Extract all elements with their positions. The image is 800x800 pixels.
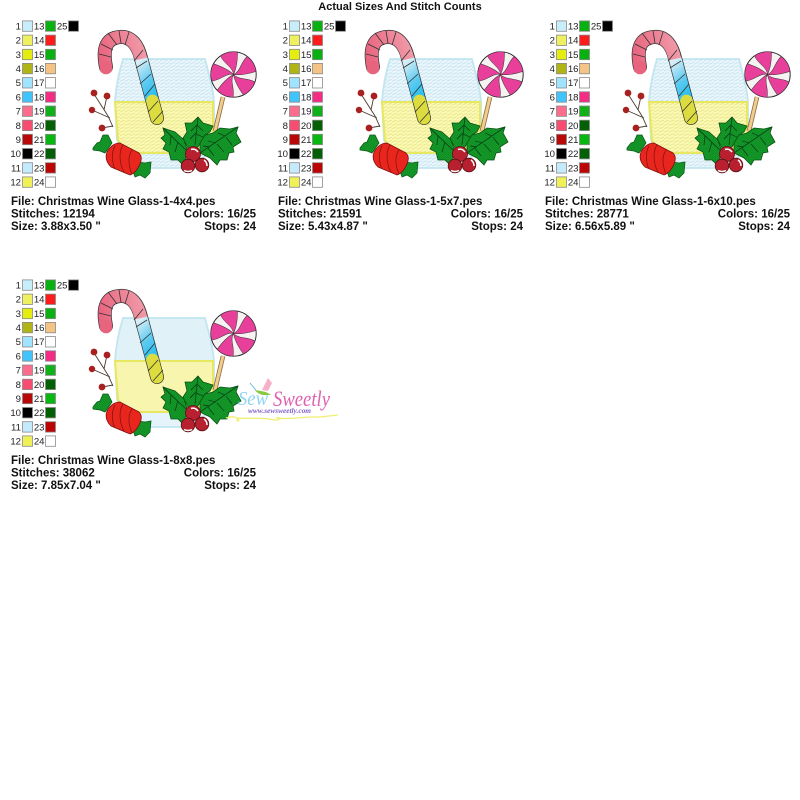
file details: Stops: 24 — [204, 221, 257, 233]
colour legend: 5 — [283, 78, 288, 89]
colour legend: 4 — [16, 323, 22, 334]
embroidery: wine glass with candy and holly — [89, 290, 257, 437]
colour legend: 20 — [34, 380, 44, 391]
colour legend: 14 — [568, 36, 579, 47]
colour legend: 2 — [16, 36, 21, 47]
colour legend: 7 — [16, 107, 21, 118]
file details: Size: 7.85x7.04 " — [11, 480, 101, 492]
colour legend: 12 — [277, 178, 288, 188]
file details: Colors: 16/25 — [718, 208, 791, 220]
colour legend: 22 — [568, 149, 578, 160]
colour legend — [10, 280, 78, 448]
colour legend: 25 — [57, 22, 68, 32]
colour legend: 4 — [16, 64, 22, 75]
colour legend: 21 — [34, 394, 44, 405]
colour legend: 17 — [34, 337, 44, 348]
colour legend: 21 — [34, 135, 44, 146]
colour legend: 8 — [16, 121, 21, 132]
colour legend: 21 — [301, 135, 312, 146]
file details — [11, 455, 257, 492]
colour legend: 18 — [301, 92, 312, 103]
colour legend: 13 — [34, 22, 44, 32]
colour legend: 13 — [34, 280, 44, 292]
yellow squiggle — [226, 415, 338, 421]
file details: Stitches: 38062 — [11, 468, 95, 480]
file details — [545, 196, 791, 233]
colour legend: 10 — [10, 149, 21, 160]
watermark: Sew Sweetly logo — [226, 378, 338, 421]
colour legend: 25 — [57, 280, 68, 292]
file details: File: Christmas Wine Glass-1-6x10.pes — [545, 196, 756, 208]
colour legend: 6 — [16, 92, 21, 103]
colour legend: 24 — [568, 178, 579, 188]
colour legend: 16 — [301, 64, 312, 75]
colour legend: 9 — [16, 135, 21, 146]
colour legend: 9 — [283, 135, 288, 146]
colour legend: 7 — [550, 107, 555, 118]
colour legend: 25 — [324, 22, 334, 32]
colour legend: 3 — [550, 50, 555, 61]
colour legend: 16 — [568, 64, 578, 75]
colour legend: 20 — [301, 121, 312, 132]
colour legend: 18 — [34, 92, 44, 103]
colour legend: 3 — [16, 50, 21, 61]
file details: Stops: 24 — [471, 221, 524, 233]
file details: Size: 3.88x3.50 " — [11, 221, 101, 233]
colour legend: 22 — [34, 149, 44, 160]
colour legend: 15 — [34, 309, 44, 320]
colour legend: 12 — [10, 436, 21, 448]
colour legend: 14 — [34, 295, 45, 306]
colour legend: 4 — [550, 64, 556, 75]
file details: Size: 5.43x4.87 " — [278, 221, 368, 233]
colour legend: 2 — [550, 36, 555, 47]
colour legend: 5 — [550, 78, 555, 89]
file details: File: Christmas Wine Glass-1-8x8.pes — [11, 455, 215, 467]
colour legend: 23 — [568, 163, 578, 174]
title: Actual Sizes And Stitch Counts — [318, 1, 482, 13]
colour legend — [277, 21, 346, 189]
logo wordmark: Sew — [238, 388, 269, 410]
file details: Stitches: 28771 — [545, 208, 629, 220]
colour legend: 12 — [10, 178, 21, 188]
colour legend: 23 — [34, 422, 44, 433]
colour legend: 9 — [550, 135, 555, 146]
colour legend: 23 — [301, 163, 312, 174]
colour legend: 19 — [568, 107, 578, 118]
colour legend: 7 — [283, 107, 288, 118]
colour legend: 6 — [16, 351, 21, 362]
colour legend: 13 — [568, 22, 578, 32]
file details — [11, 196, 257, 233]
colour legend: 6 — [550, 92, 555, 103]
colour legend: 2 — [16, 295, 21, 306]
colour legend: 24 — [34, 436, 45, 448]
colour legend: 19 — [301, 107, 312, 118]
colour legend: 17 — [301, 78, 312, 89]
colour legend: 14 — [34, 36, 45, 47]
colour legend: 1 — [283, 22, 288, 32]
file details: Stops: 24 — [738, 221, 791, 233]
file details: Colors: 16/25 — [451, 208, 524, 220]
colour legend: 20 — [568, 121, 578, 132]
file details: File: Christmas Wine Glass-1-5x7.pes — [278, 196, 482, 208]
colour legend: 1 — [16, 22, 21, 32]
colour legend: 14 — [301, 36, 312, 47]
colour legend: 25 — [591, 22, 602, 32]
panel: 6x10 design — [544, 21, 791, 233]
panel: 5x7 design — [277, 21, 524, 233]
colour legend: 8 — [283, 121, 288, 132]
embroidery: wine glass with candy and holly — [89, 31, 257, 178]
colour legend: 24 — [301, 178, 312, 188]
colour legend: 22 — [301, 149, 312, 160]
colour legend: 19 — [34, 366, 44, 377]
colour legend: 10 — [544, 149, 555, 160]
colour legend: 5 — [16, 78, 21, 89]
logo wordmark: www.sewsweetly.com — [248, 406, 311, 415]
colour legend: 17 — [34, 78, 44, 89]
embroidery: wine glass with candy and holly — [623, 31, 791, 178]
colour legend — [544, 21, 612, 189]
colour legend — [10, 21, 78, 189]
colour legend: 5 — [16, 337, 21, 348]
panel: 8x8 design — [10, 280, 257, 492]
logo wordmark — [238, 386, 330, 415]
panel: 4x4 design — [10, 21, 257, 233]
colour legend: 18 — [34, 351, 44, 362]
embroidery: wine glass with candy and holly — [356, 31, 524, 178]
colour legend: 24 — [34, 178, 45, 188]
colour legend: 20 — [34, 121, 44, 132]
colour legend: 23 — [34, 163, 44, 174]
colour legend: 4 — [283, 64, 289, 75]
colour legend: 11 — [545, 163, 555, 174]
logo wordmark: Sweetly — [273, 386, 330, 411]
file details: Stops: 24 — [204, 480, 257, 492]
colour legend: 10 — [277, 149, 288, 160]
file details: File: Christmas Wine Glass-1-4x4.pes — [11, 196, 215, 208]
colour legend: 7 — [16, 366, 21, 377]
colour legend: 18 — [568, 92, 578, 103]
colour legend: 12 — [544, 178, 555, 188]
colour legend: 1 — [16, 280, 21, 292]
colour legend: 11 — [11, 163, 21, 174]
colour legend: 10 — [10, 408, 21, 419]
file details: Stitches: 12194 — [11, 208, 95, 220]
colour legend: 16 — [34, 64, 44, 75]
colour legend: 6 — [283, 92, 288, 103]
colour legend: 3 — [283, 50, 288, 61]
file details — [278, 196, 524, 233]
colour legend: 3 — [16, 309, 21, 320]
colour legend: 11 — [278, 163, 288, 174]
colour legend: 17 — [568, 78, 578, 89]
colour legend: 9 — [16, 394, 21, 405]
icon: hummingbird — [250, 378, 272, 395]
colour legend: 8 — [550, 121, 555, 132]
file details: Stitches: 21591 — [278, 208, 362, 220]
file details: Size: 6.56x5.89 " — [545, 221, 635, 233]
file details: Colors: 16/25 — [184, 208, 257, 220]
colour legend: 8 — [16, 380, 21, 391]
colour legend: 13 — [301, 22, 312, 32]
colour legend: 16 — [34, 323, 44, 334]
colour legend: 19 — [34, 107, 44, 118]
colour legend: 1 — [550, 22, 555, 32]
colour legend: 21 — [568, 135, 578, 146]
file details: Colors: 16/25 — [184, 468, 257, 480]
colour legend: 15 — [568, 50, 578, 61]
colour legend: 2 — [283, 36, 288, 47]
colour legend: 15 — [34, 50, 44, 61]
colour legend: 22 — [34, 408, 44, 419]
colour legend: 11 — [11, 422, 21, 433]
colour legend: 15 — [301, 50, 312, 61]
